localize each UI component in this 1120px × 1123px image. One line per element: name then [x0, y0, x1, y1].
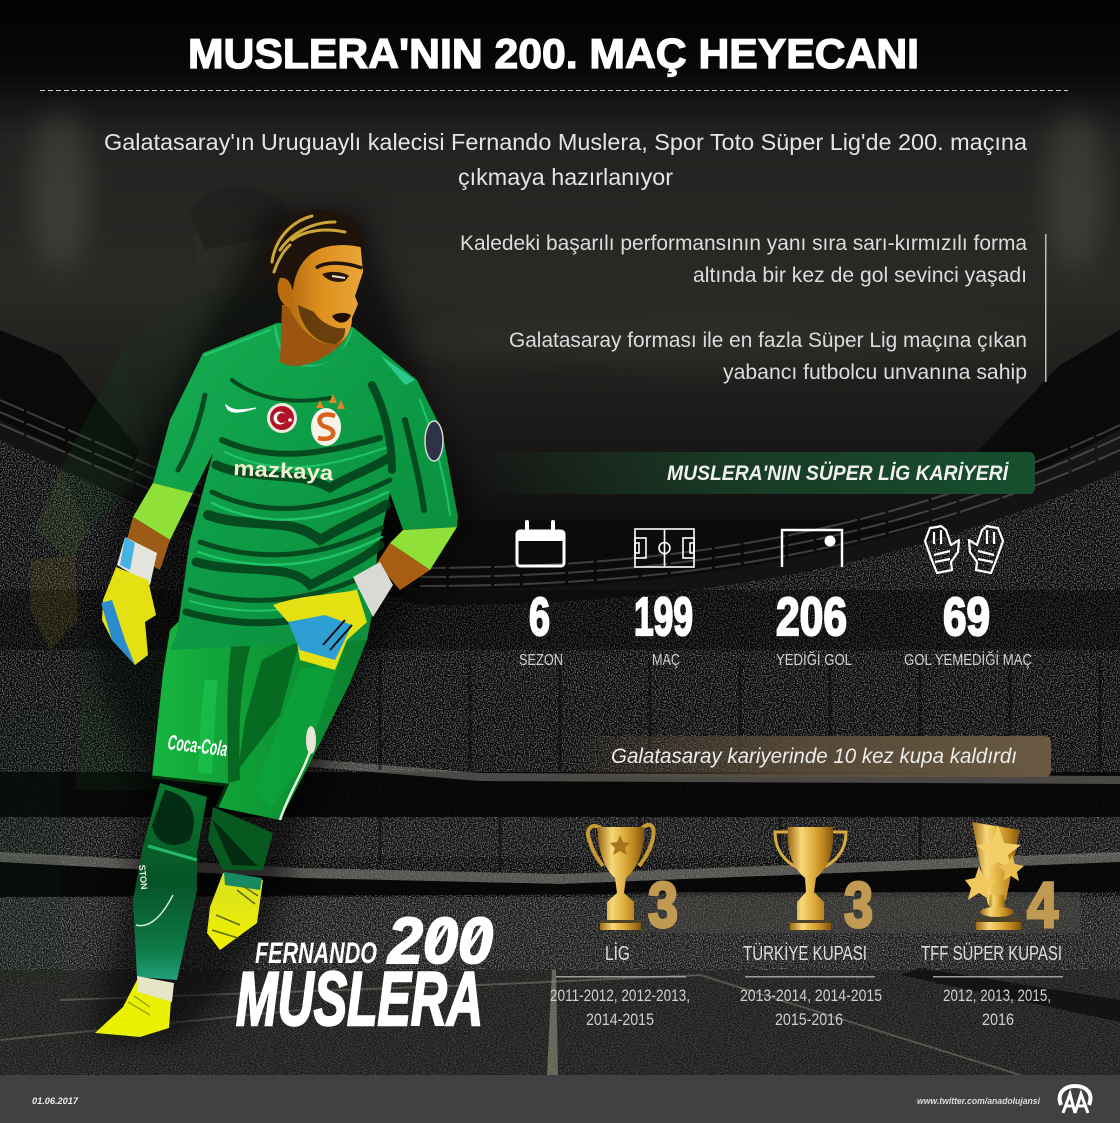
trophy: league — [550, 825, 690, 1029]
stat: matches — [634, 529, 694, 669]
icon: cup with stars — [588, 825, 654, 930]
trophy: super cup: TFF SÜPER KUPASI — [921, 943, 1062, 965]
turkey badge — [267, 403, 297, 433]
intro text: çıkmaya hazırlanıyor — [458, 164, 673, 190]
stat: goals conceded: 206 — [776, 587, 847, 647]
stat: goals conceded: YEDİĞİ GOL — [776, 650, 852, 669]
trophy: super cup: 4 — [1027, 869, 1058, 941]
sleeve patch — [425, 421, 443, 461]
title: MUSLERA'NIN 200. MAÇ HEYECANI — [188, 30, 919, 77]
jersey — [133, 323, 458, 650]
number strip — [600, 892, 1080, 933]
trophies band: Galatasaray kariyerinde 10 kez kupa kaldırdı — [611, 745, 1017, 768]
intro text: Galatasaray'ın Uruguaylı kalecisi Fernando Muslera, Spor Toto Süper Lig'de 200. maçına — [104, 129, 1027, 155]
icon: pitch — [635, 529, 694, 567]
fact texts: altında bir kez de gol sevinci yaşadı — [693, 264, 1027, 287]
trophy: super cup: 2012, 2013, 2015, — [943, 986, 1051, 1005]
icon: cup — [775, 827, 846, 930]
boots — [95, 872, 263, 1037]
sleeve cuff right — [390, 527, 457, 570]
ghost player — [0, 185, 290, 980]
right hand — [273, 543, 430, 670]
trophy: turkish cup: TÜRKİYE KUPASI — [743, 942, 867, 965]
stat: goals conceded — [776, 530, 852, 669]
right leg — [208, 807, 273, 870]
fact texts: Kaledeki başarılı performansının yanı sıra sarı-kırmızılı forma — [460, 232, 1027, 255]
stat: matches: MAÇ — [652, 652, 680, 669]
player — [95, 210, 458, 1037]
head — [266, 210, 364, 366]
icon: goal — [782, 530, 842, 567]
shorts: Coca-Cola — [166, 731, 229, 761]
footer — [0, 1075, 1120, 1123]
stat: clean sheets: GOL YEMEDİĞİ MAÇ — [904, 650, 1032, 669]
left hand — [101, 517, 170, 665]
trophy: league: 2014-2015 — [586, 1010, 654, 1029]
trophy: league: LİG — [605, 942, 630, 965]
trophy: turkish cup: 3 — [844, 869, 873, 941]
name logo — [236, 904, 493, 1042]
stat: season: SEZON — [519, 652, 563, 669]
icon: calendar — [517, 522, 565, 566]
name logo: MUSLERA — [236, 957, 483, 1042]
trophy: league: 2011-2012, 2012-2013, — [550, 986, 690, 1005]
trophy: turkish cup: 2015-2016 — [775, 1010, 843, 1029]
fact texts: yabancı futbolcu unvanına sahip — [723, 361, 1027, 384]
icon: star trophy — [965, 822, 1024, 930]
sleeve cuff left — [133, 483, 193, 540]
icon: AA logo — [1060, 1086, 1090, 1113]
name logo: FERNANDO — [255, 937, 377, 970]
career band: MUSLERA'NIN SÜPER LİG KARİYERİ — [667, 462, 1009, 485]
shorts — [152, 600, 370, 820]
200 number: 200 — [386, 904, 493, 977]
icon: gloves — [925, 526, 1003, 573]
player shadow — [90, 210, 470, 1040]
left leg: STON — [137, 864, 149, 890]
trophy: turkish cup: 2013-2014, 2014-2015 — [740, 986, 882, 1005]
stat: season: 6 — [529, 587, 550, 647]
nike swoosh — [226, 405, 256, 412]
footer: 01.06.2017 — [32, 1096, 79, 1106]
fact texts — [460, 232, 1046, 384]
galatasaray crest — [311, 394, 345, 446]
footer: www.twitter.com/anadolujansi — [917, 1096, 1040, 1106]
trophies band — [560, 736, 1051, 777]
stat: clean sheets — [904, 526, 1032, 669]
stat: matches: 199 — [634, 587, 693, 647]
trophy: league: 3 — [648, 869, 678, 941]
trophy: super cup — [921, 822, 1063, 1029]
trophy: super cup: 2016 — [982, 1010, 1014, 1029]
stat: clean sheets: 69 — [943, 587, 990, 647]
intro text — [104, 129, 1027, 190]
trophy: turkish cup — [740, 827, 882, 1029]
fact texts: Galatasaray forması ile en fazla Süper Lig maçına çıkan — [509, 329, 1027, 352]
left leg — [133, 783, 207, 980]
stat: season — [517, 522, 565, 669]
career band — [470, 452, 1035, 494]
sponsor: mazkaya — [233, 457, 334, 485]
